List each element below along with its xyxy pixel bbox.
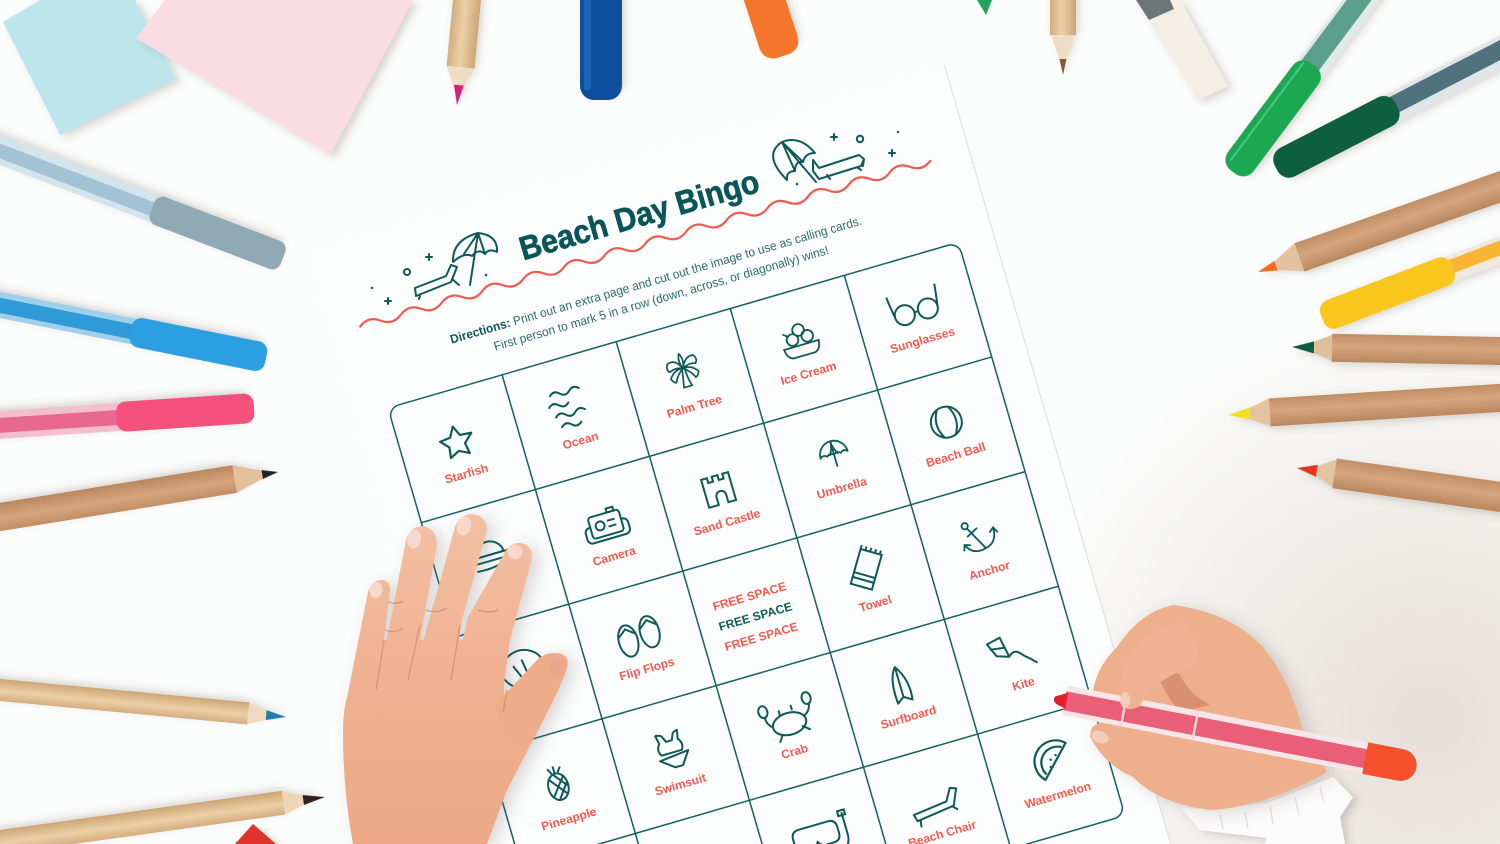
header icons: right dots [796, 131, 899, 185]
marker: yellow [1317, 231, 1500, 332]
cell: free space: FREE SPACE [723, 619, 800, 654]
cell: ocean [545, 384, 600, 453]
paper right edge [944, 65, 1223, 844]
cell: ice cream: Ice Cream [779, 359, 838, 388]
thumb [495, 653, 568, 745]
cell: palm tree: Palm Tree [665, 392, 724, 421]
cell: camera: Camera [591, 543, 638, 569]
pencil: dark green tip [1292, 333, 1500, 365]
cell: palm tree [652, 346, 724, 421]
middle finger [408, 514, 487, 695]
cell: crab: Crab [779, 741, 810, 762]
index finger over pen [1120, 622, 1198, 709]
cell: towel [841, 540, 898, 615]
pencil: dark tip [0, 785, 327, 844]
directions: Directions: Print out an extra page and cut out the image to use as calling cards. [449, 214, 863, 347]
cell: beach ball [913, 399, 987, 470]
finger nail [1120, 692, 1130, 708]
cell: ocean: Ocean [561, 429, 600, 452]
ring finger [375, 526, 437, 702]
cell: watermelon [1010, 734, 1093, 811]
cell: towel: Towel [857, 592, 893, 615]
cell: hat [468, 535, 516, 573]
marker: pink [0, 393, 255, 444]
paper [305, 65, 1223, 844]
bingo sheet [305, 65, 1223, 844]
cell: free space [711, 579, 800, 654]
cell: sand castle: Sand Castle [692, 506, 762, 539]
marker: green [1220, 0, 1382, 182]
cell: sunglasses: Sunglasses [889, 324, 957, 356]
pencil: top right [1050, 0, 1076, 75]
marker: blue [0, 282, 269, 373]
sticky note: blue [3, 0, 176, 135]
cell: surfboard [866, 659, 938, 732]
cell: surfboard: Surfboard [879, 703, 938, 732]
pen marker [1051, 682, 1419, 784]
sleeve [1180, 777, 1353, 844]
cell: starfish [431, 420, 490, 487]
cell: anchor: Anchor [967, 558, 1012, 583]
cell: starfish: Starfish [443, 461, 490, 487]
pen cap [1362, 742, 1419, 784]
pencil: black tip [0, 458, 280, 541]
cell: umbrella [804, 435, 869, 502]
thumb nail [1089, 728, 1111, 746]
finger creases [376, 601, 507, 712]
hand shape [1090, 605, 1327, 810]
pen barrel [1062, 686, 1372, 774]
sticky note: pink [136, 0, 413, 155]
pen bands [1121, 697, 1198, 740]
marker: top orange [736, 0, 802, 62]
directions line 2: First person to mark 5 in a row (down, across, or diagonally) wins! [492, 243, 830, 354]
fingernails [368, 515, 569, 679]
cell: beach chair [897, 784, 978, 844]
cell: umbrella: Umbrella [815, 474, 869, 502]
pencil: top pink tip [443, 0, 482, 106]
cell: flip flops: Flip Flops [618, 654, 676, 684]
pencil: orange tip [1253, 157, 1500, 286]
cell: beach ball: Beach Ball [924, 440, 987, 470]
bingo cells [426, 277, 1094, 844]
header icons: left dots [371, 274, 487, 289]
cell: kite: Kite [1011, 674, 1037, 694]
cell: sand castle [681, 467, 762, 539]
eraser [1136, 0, 1228, 100]
cell: kite [986, 630, 1044, 697]
pencil: yellow tip [1227, 383, 1500, 429]
marker: top navy [580, 0, 622, 100]
red object at bottom [235, 824, 276, 844]
palm [343, 640, 533, 844]
cell: anchor [955, 514, 1012, 583]
title: Beach Day Bingo [515, 162, 763, 267]
cell: watermelon: Watermelon [1023, 779, 1093, 811]
header icons: left [385, 233, 497, 304]
folded finger shadow [1157, 669, 1210, 712]
left hand [343, 514, 569, 844]
cell: flip flops [605, 612, 676, 684]
index finger [450, 543, 532, 715]
pencil: red tip [1295, 453, 1500, 515]
cell: pineapple [526, 758, 598, 834]
cell: crab [756, 691, 826, 765]
cell: snorkel [789, 809, 855, 844]
right hand [1051, 605, 1419, 844]
cell: shell [497, 645, 548, 693]
cell: ice cream [767, 317, 838, 388]
bingo grid [388, 242, 1125, 844]
green fragment [977, 0, 992, 15]
cell: camera [580, 504, 638, 569]
pen tip [1053, 690, 1068, 709]
cell: free space: FREE SPACE [717, 599, 794, 634]
cell: swimsuit: Swimsuit [653, 770, 708, 799]
header icons: right [773, 134, 895, 182]
cell: swimsuit [640, 725, 708, 799]
marker: grey blue [0, 109, 288, 272]
cell: sunglasses [876, 282, 957, 356]
marker: dark green [1269, 25, 1500, 182]
wavy divider [359, 157, 931, 330]
cell: free space: FREE SPACE [711, 579, 788, 614]
pen core [1063, 691, 1371, 769]
pencil: blue tip [0, 674, 287, 728]
pinky finger [345, 580, 390, 708]
cell: pineapple: Pineapple [540, 804, 598, 834]
